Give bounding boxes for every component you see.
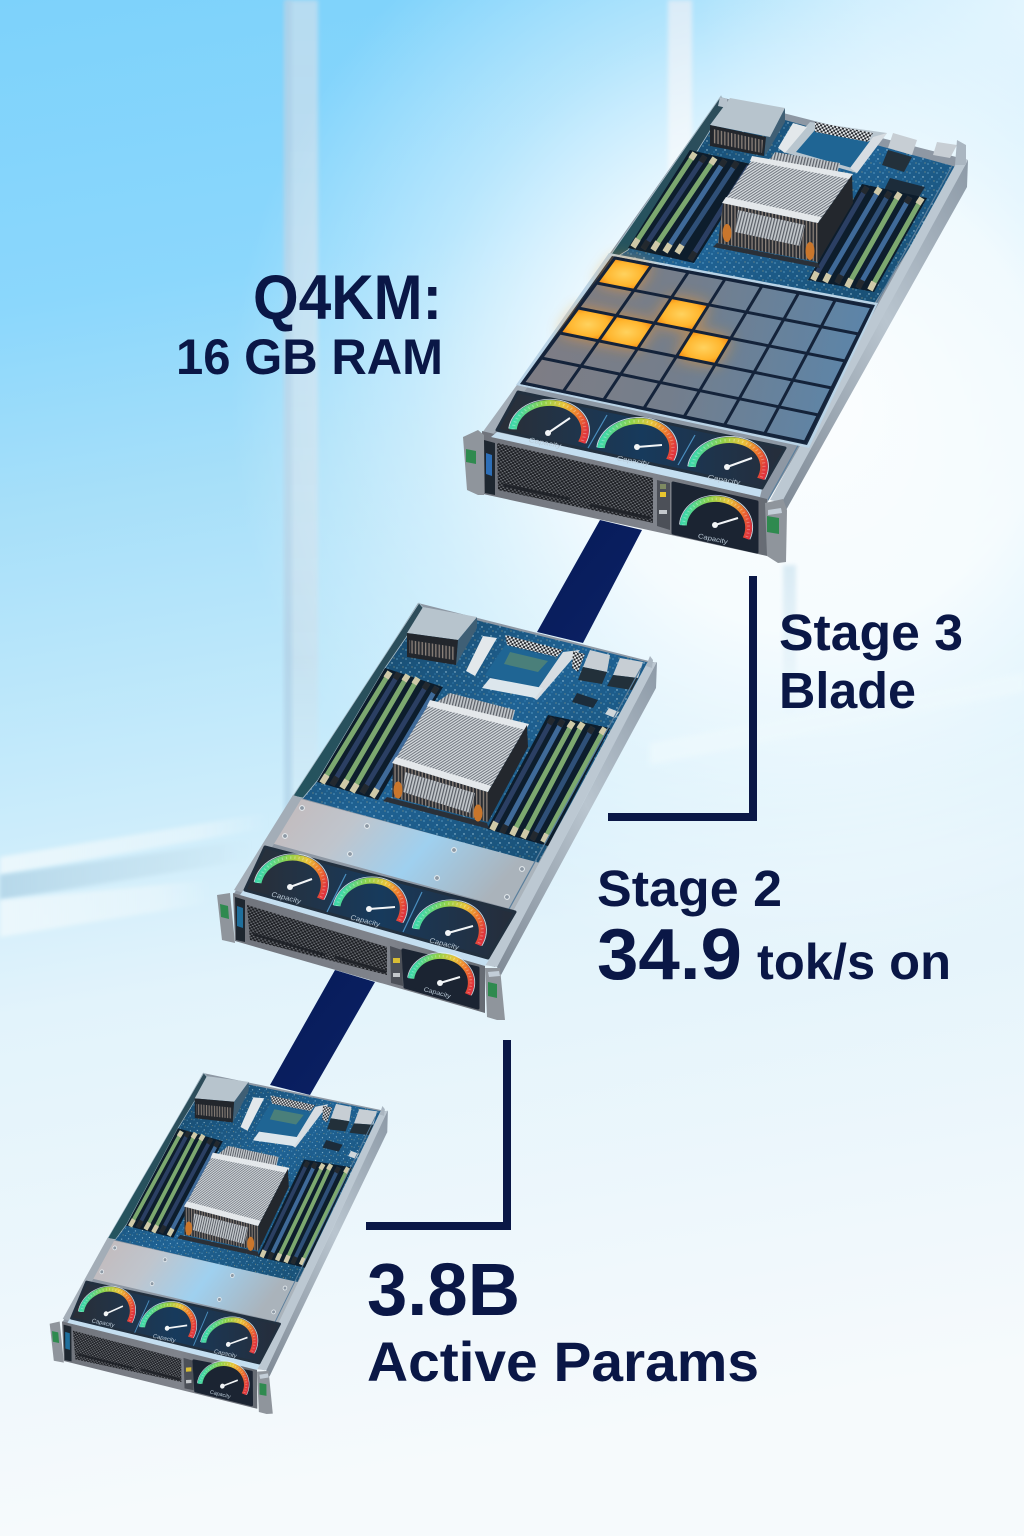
heatsink [713,152,853,268]
left mounting ear [217,893,235,943]
motherboard [610,96,960,307]
gauge 1 [505,393,599,454]
network cage [466,635,585,700]
motherboard [293,603,650,863]
heading: Q4KM 16 GB RAM: Q4KM: [253,263,442,333]
ribbon connector: stage 2 to stage 1 [270,970,375,1095]
server blade: stage 3 with heat map grid [463,96,968,563]
blue service port [484,440,495,495]
chassis rails [234,656,657,975]
gauge 3 [684,430,778,490]
gauge 2 [593,411,687,471]
heading: Q4KM 16 GB RAM: 16 GB RAM [176,329,443,385]
glowing cells [560,258,731,364]
label: active parameters [367,1248,759,1393]
right mounting ear [485,968,505,1020]
label: stage 3 blade: Blade [779,662,916,719]
gauge 3 [407,892,497,957]
left mounting ear [463,430,484,495]
ribbon connector: stage 3 to stage 2 [537,520,642,643]
front bezel [233,888,490,1013]
memory bank left [317,668,443,800]
chassis tray [233,603,657,967]
front gauge [403,945,483,1008]
label: stage 3 blade: Stage 3 [779,604,963,661]
heading: Q4KM 16 GB RAM [176,263,443,385]
heatsink [383,693,529,829]
status indicators [390,946,403,986]
left and right chassis rails [482,97,968,512]
heat map grid [516,253,878,448]
rear ports and chip [572,650,643,718]
label: stage 2 speed: tok/s on [757,934,951,990]
memory bank left [628,150,755,263]
label: stage 2 speed: Stage 2 [597,860,782,917]
label: stage 2 speed [597,860,951,995]
chassis tray [482,97,968,503]
memory bank right [808,184,927,292]
bracket connector: stage 3 [608,576,753,817]
right mounting ear [765,499,787,563]
front gauge [673,483,760,552]
rear ports [882,133,957,200]
vent grille [497,443,653,523]
label: active parameters: Active Params [367,1330,759,1393]
silver cover plate [267,798,540,910]
front bezel [482,431,767,556]
vent grille [247,905,387,975]
gauge 1 [249,846,339,911]
status indicators [657,480,670,530]
label: active parameters: 3.8B [367,1248,520,1331]
memory bank right [487,715,610,846]
gauge 2 [328,869,418,934]
power supply block [710,98,785,156]
label: stage 3 blade [779,604,963,719]
label: stage 2 speed: 34.9 [597,915,742,995]
bracket connector: stage 2 [366,1040,507,1226]
gauge strip [497,392,785,490]
server blade: stage 1 [48,1062,390,1427]
blue service port [235,897,245,942]
gauge strip [245,846,515,958]
power supply block [407,607,477,665]
network cage [778,122,887,173]
server blade: stage 2 [217,603,657,1020]
